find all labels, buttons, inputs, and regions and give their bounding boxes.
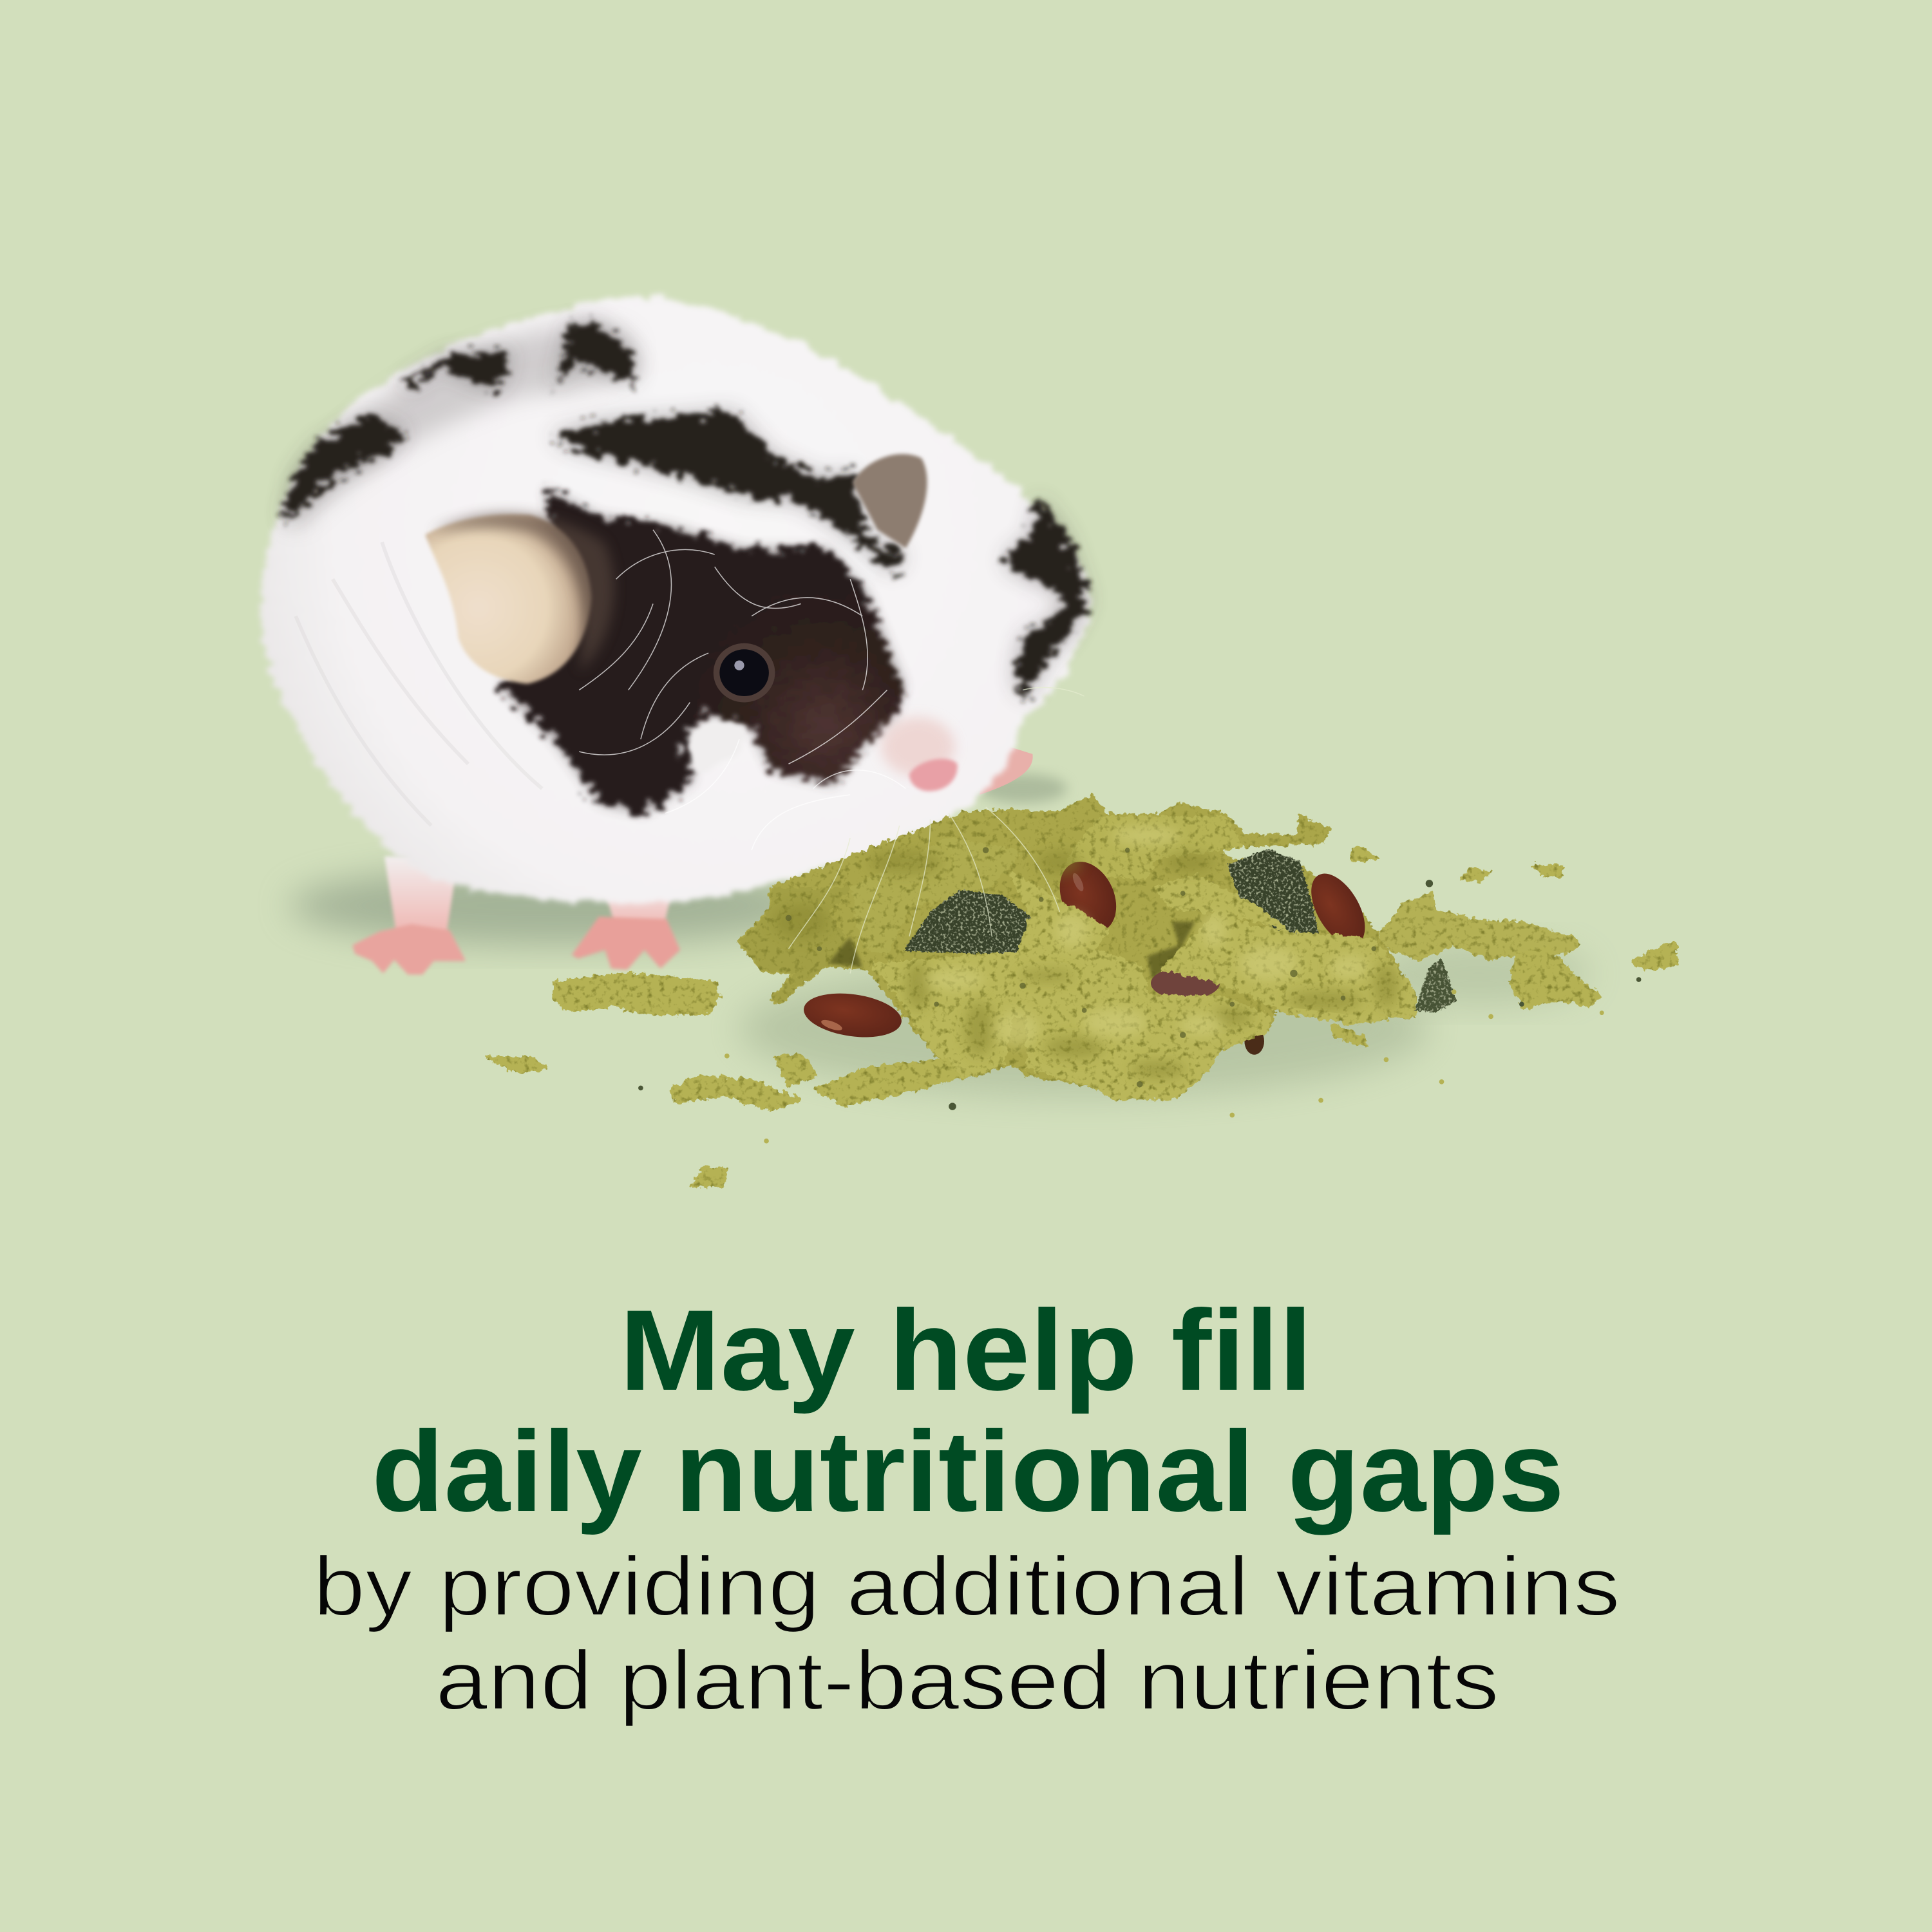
body [261, 296, 1090, 903]
illustration: hamster eating food [261, 296, 1676, 1186]
cheek stripe [688, 721, 747, 774]
face halo [500, 488, 904, 813]
left fold [739, 887, 862, 1003]
infographic canvas [258, 291, 1679, 1726]
green flecks [786, 847, 1376, 1087]
hamster [261, 296, 1090, 974]
dark crevices [828, 881, 1214, 980]
ground shadows [290, 774, 1589, 1097]
right foot [572, 916, 680, 970]
upper left flake [850, 838, 1023, 955]
subheading: by providing additional vitamins [313, 1539, 1620, 1633]
left leg [384, 857, 459, 936]
whiskers over food [788, 687, 1084, 973]
right leg [601, 877, 675, 931]
top flake [1059, 816, 1243, 880]
grey fur halo on back [286, 325, 635, 530]
right strip flake [1380, 893, 1580, 960]
muzzle [881, 717, 955, 776]
main mash [739, 796, 1416, 1098]
heading: daily nutritional gaps [372, 1407, 1564, 1535]
eye [714, 643, 775, 703]
heading [372, 1286, 1564, 1535]
left ear [425, 515, 591, 684]
face marking [500, 488, 904, 813]
scattered crumbs [487, 846, 1676, 1186]
right ear [853, 454, 927, 548]
rear foot [980, 739, 1033, 795]
ear fringe [431, 513, 614, 672]
fur shading [296, 542, 542, 826]
heading: May help fill [620, 1286, 1312, 1414]
food pile [739, 796, 1580, 1098]
fur hairs [579, 530, 905, 850]
nose [909, 759, 958, 791]
tiny specks [638, 880, 1641, 1144]
left foot [352, 924, 466, 974]
light flakes [875, 874, 1416, 1098]
back markings [283, 323, 1088, 700]
seeds [801, 853, 1376, 1055]
lump shading [774, 826, 1399, 1087]
subheading [313, 1539, 1620, 1727]
dark leaf chunks [903, 849, 1320, 955]
soft marking halo [283, 323, 1088, 700]
subheading: and plant-based nutrients [435, 1633, 1499, 1727]
dark flake [1414, 959, 1456, 1013]
